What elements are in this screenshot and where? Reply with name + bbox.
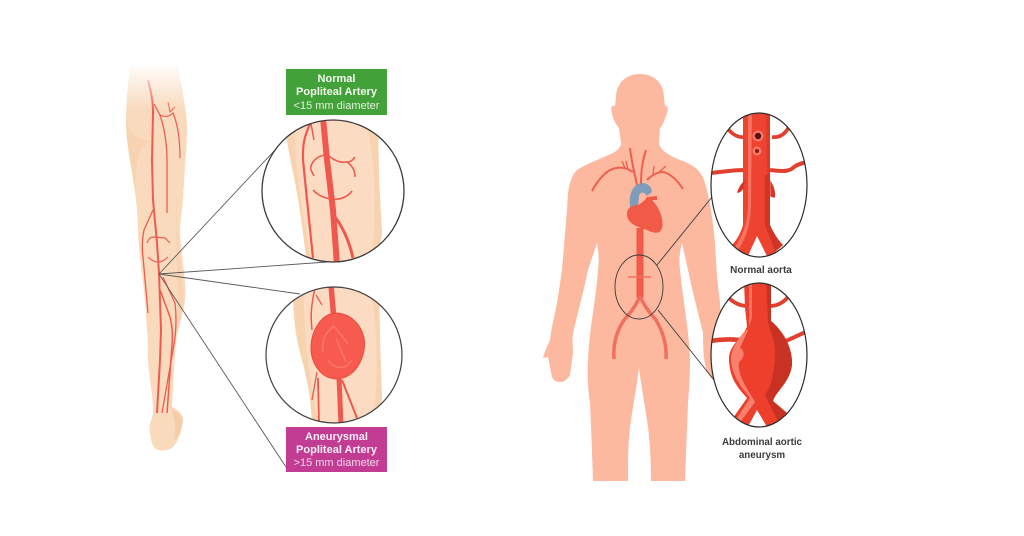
normal aorta caption: Normal aorta (730, 265, 792, 276)
normal popliteal artery label: <15 mm diameter (294, 100, 380, 112)
detail oval: normal aorta (710, 110, 808, 258)
abdominal aortic aneurysm caption: Abdominal aortic (722, 437, 803, 448)
detail oval: abdominal aortic aneurysm (710, 280, 808, 432)
aneurysmal popliteal artery label: >15 mm diameter (294, 457, 380, 469)
pointer lines to aorta ovals (657, 197, 714, 380)
detail circle: aneurysmal popliteal artery (266, 285, 402, 425)
human body silhouette (543, 74, 726, 481)
aneurysmal popliteal artery label: Aneurysmal (305, 431, 368, 443)
normal popliteal artery label: Popliteal Artery (296, 86, 378, 98)
aneurysmal popliteal artery label: Popliteal Artery (296, 444, 378, 456)
abdominal locator oval (615, 255, 663, 319)
aneurysmal popliteal artery label (286, 427, 387, 472)
normal popliteal artery label: Normal (318, 73, 355, 85)
icon: heart with blue aortic arch (627, 183, 663, 233)
normal popliteal artery label (286, 69, 387, 115)
icon: aorta and iliac arteries (614, 228, 666, 359)
pointer lines from knee to detail circles (159, 150, 327, 467)
abdominal aortic aneurysm caption (722, 437, 803, 461)
detail circle: normal popliteal artery (262, 115, 404, 265)
abdominal aortic aneurysm caption: aneurysm (739, 450, 785, 461)
leg illustration (120, 62, 192, 451)
